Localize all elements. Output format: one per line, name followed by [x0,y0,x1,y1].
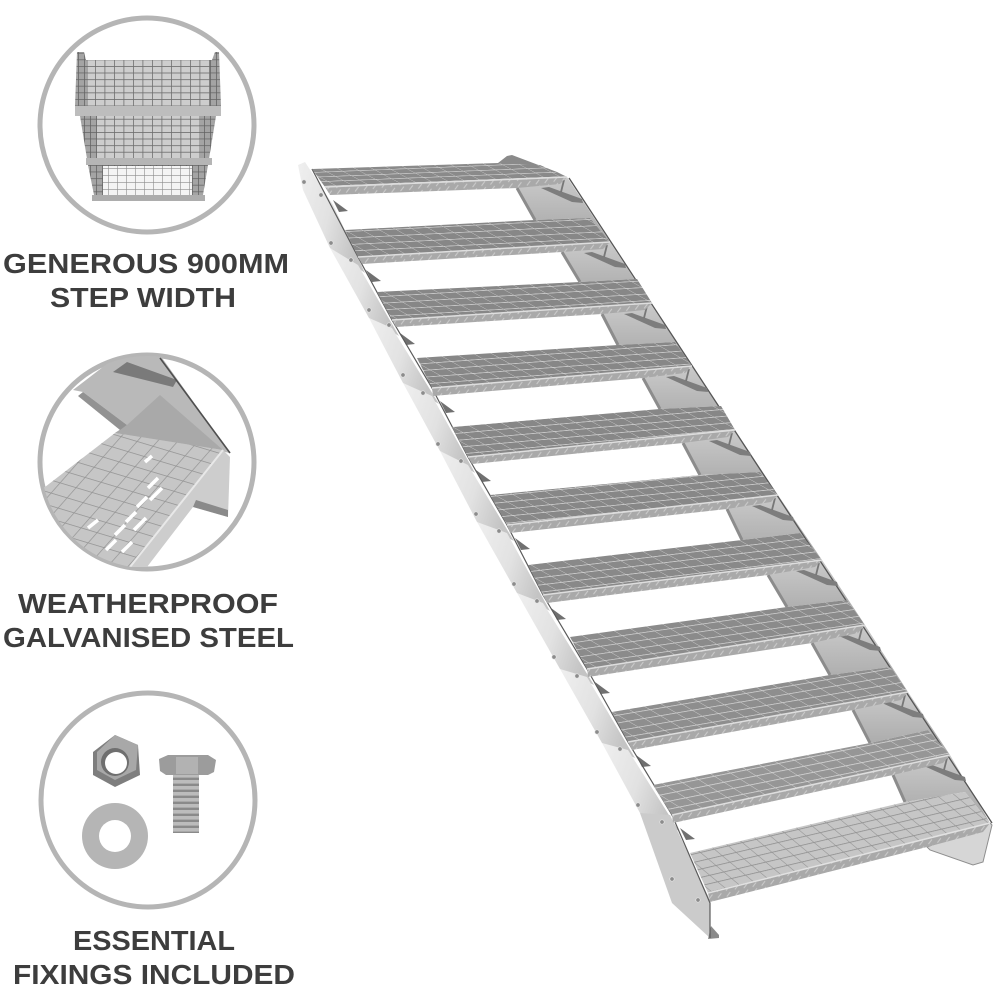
step 1 [312,163,567,195]
left stringer panels [298,162,710,938]
circle: fixings [41,693,255,907]
bottom rear wall and foot [927,823,992,865]
label: essential fixings included: FIXINGS INCLUDED [13,959,295,990]
label: generous step width [3,248,289,313]
rivets [302,180,700,902]
right side walls [517,177,990,823]
step 5 [452,406,735,464]
main staircase [298,155,992,939]
right edge line [569,178,992,823]
label: essential fixings included: ESSENTIAL [73,925,235,956]
left brackets [333,200,695,840]
step 11 [690,792,990,902]
label: essential fixings included [13,925,295,990]
label: generous step width: STEP WIDTH [50,282,236,313]
left inner edge [312,169,710,938]
icon: hex nut [93,735,140,787]
circle: step width [40,18,254,232]
icon: tread close-up [44,358,231,567]
right wall inner edges [517,188,905,802]
icon: washer [82,803,148,869]
step 3 [377,279,652,327]
step 6 [490,472,778,533]
step 10 [653,730,950,823]
label: weatherproof galvanised steel [3,588,294,653]
label: generous step width: GENEROUS 900MM [3,248,289,279]
step 8 [570,600,865,677]
step 7 [528,533,822,603]
right brackets [541,180,966,781]
step 2 [345,218,610,264]
label: weatherproof galvanised steel: WEATHERPROOF [18,588,278,619]
icon: bolt [159,755,216,833]
label: weatherproof galvanised steel: GALVANISED STEEL [3,622,294,653]
bottom foot [708,926,719,939]
step 4 [417,342,692,396]
icon: front view of stairs [75,52,221,201]
top bracket [498,155,567,178]
circle: galvanised steel close-up [30,350,254,570]
step 9 [612,667,908,750]
